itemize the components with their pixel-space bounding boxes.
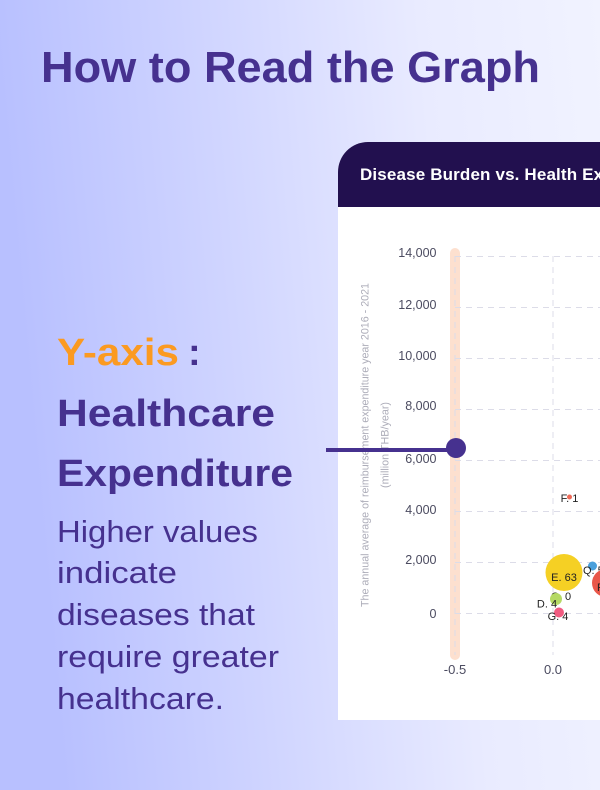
y-axis tick labels: 2,000 [405,553,437,567]
x-axis tick labels: -0.5 [444,662,466,677]
bubble C: C. 0 [551,591,571,603]
bubble F.1: F. 1 [561,493,578,505]
chart header [338,142,600,207]
y-axis tick labels: 6,000 [405,452,437,466]
y-axis tick labels: 12,000 [398,298,437,312]
panel: chart card [338,142,600,720]
body copy: healthcare. [57,681,224,716]
bubble G: G. 4 [548,611,568,623]
y-axis title [360,283,392,607]
title: How to Read the Graph [41,43,540,92]
body copy: require greater [57,639,279,674]
y-axis tick labels [398,246,437,621]
y-axis tick labels: 10,000 [398,349,437,363]
heading: Y-axis: Y-axis [57,332,179,374]
x-axis tick labels: 0.0 [544,662,562,677]
y-axis title: The annual average of reimbursement expenditure year 2016 - 2021 [360,283,372,607]
y-axis tick labels: 0 [430,607,437,621]
bubble D: D. 4 [537,598,557,610]
body copy: indicate [57,555,177,590]
y-axis tick labels: 4,000 [405,503,437,517]
heading: Y-axis [57,332,293,495]
body copy: Higher values [57,514,258,549]
body copy [57,514,279,716]
y-axis highlight band [450,248,460,660]
y-axis title: (million THB/year) [380,402,392,488]
bubble E: E. 63 [551,572,577,584]
text block: Y-axis explanation [57,332,293,716]
heading: Y-axis: Healthcare [57,393,275,435]
connector from text to y-axis [326,438,466,458]
bubbles [537,493,600,623]
heading: Y-axis: Expenditure [57,453,293,495]
x-axis tick labels [444,665,562,674]
heading: Y-axis: : [188,332,201,374]
y-axis tick labels: 8,000 [405,399,437,413]
y-axis tick labels: 14,000 [398,246,437,260]
body copy: diseases that [57,597,255,632]
